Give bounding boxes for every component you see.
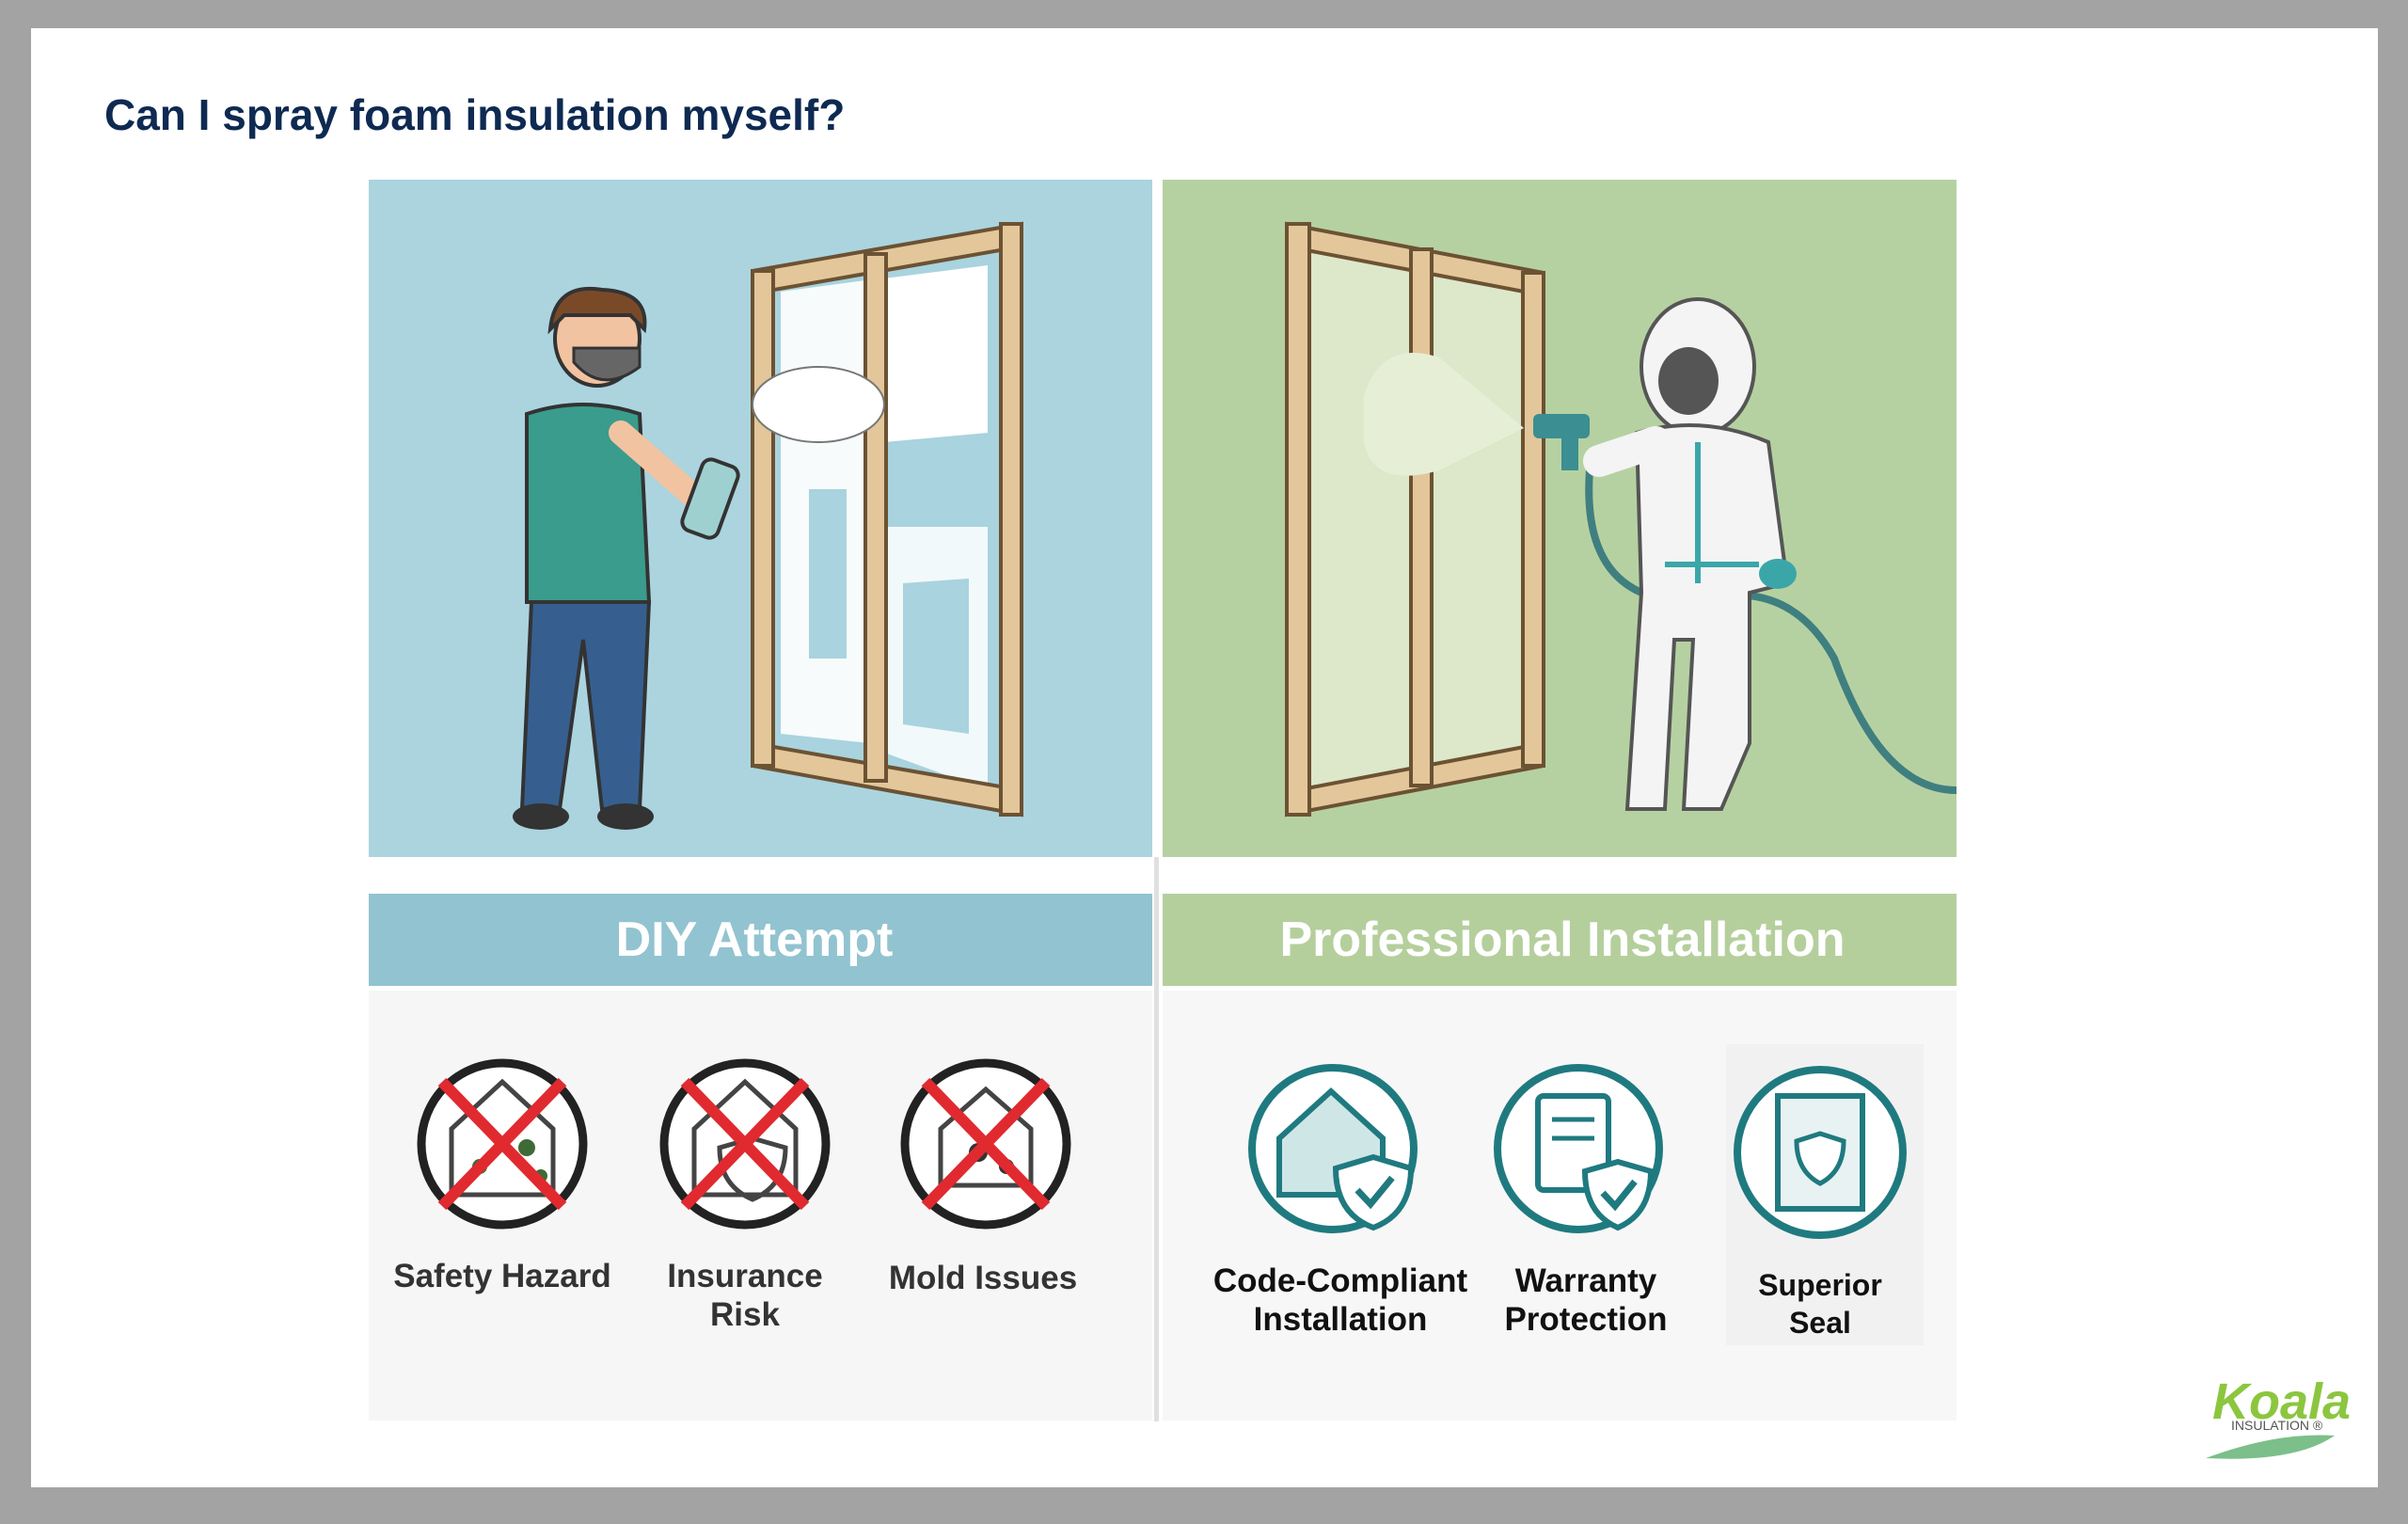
- label: Superior Seal: Superior: [1758, 1268, 1882, 1302]
- label bar: Professional Installation: [1163, 894, 1956, 986]
- label: Code-Compliant Installation: Installation: [1254, 1301, 1427, 1338]
- panel: professional benefits: [1163, 991, 1956, 1421]
- title: Can I spray foam insulation myself?: [104, 90, 845, 139]
- label: Superior Seal: Seal: [1789, 1306, 1851, 1340]
- label bar: DIY Attempt: DIY Attempt: [616, 913, 893, 967]
- icon: code-compliant: [1252, 1068, 1414, 1230]
- icon: superior seal: [1726, 1044, 1924, 1345]
- label: Insurance Risk: Risk: [710, 1296, 780, 1333]
- DIY person: [513, 289, 740, 830]
- label: Code-Compliant Installation: Code-Compliant: [1213, 1262, 1467, 1299]
- label: Safety Hazard: Safety Hazard: [393, 1258, 611, 1294]
- foam blob spray: [752, 367, 884, 442]
- logo: Koala Insulation: [2206, 1373, 2351, 1459]
- spray cone: [1364, 353, 1524, 476]
- panel: professional illustration: [1163, 180, 1956, 857]
- professional worker: [1533, 299, 1797, 809]
- wall frame filled with foam: [1287, 224, 1544, 815]
- logo: Koala Insulation: INSULATION ®: [2231, 1418, 2323, 1433]
- divider: [1154, 857, 1159, 1421]
- label: Insurance Risk: Insurance: [667, 1258, 823, 1294]
- wall frame with messy foam: [752, 224, 1022, 815]
- hose: [1589, 470, 1956, 790]
- label bar: DIY Attempt: [369, 894, 1152, 986]
- label: Mold Issues: Mold Issues: [889, 1260, 1077, 1296]
- icon: mold issues: [905, 1063, 1067, 1225]
- logo: Koala Insulation: Koala: [2212, 1373, 2351, 1430]
- panel: DIY illustration: [369, 180, 1152, 857]
- label: Warranty Protection: Protection: [1504, 1301, 1668, 1338]
- icon: insurance risk: [664, 1063, 826, 1225]
- label bar: Professional Installation: Professional Installation: [1279, 913, 1846, 967]
- icon: safety hazard: [421, 1063, 583, 1225]
- label: Warranty Protection: Warranty: [1515, 1262, 1656, 1299]
- icon: warranty: [1497, 1068, 1659, 1230]
- panel: DIY risks: [369, 991, 1152, 1421]
